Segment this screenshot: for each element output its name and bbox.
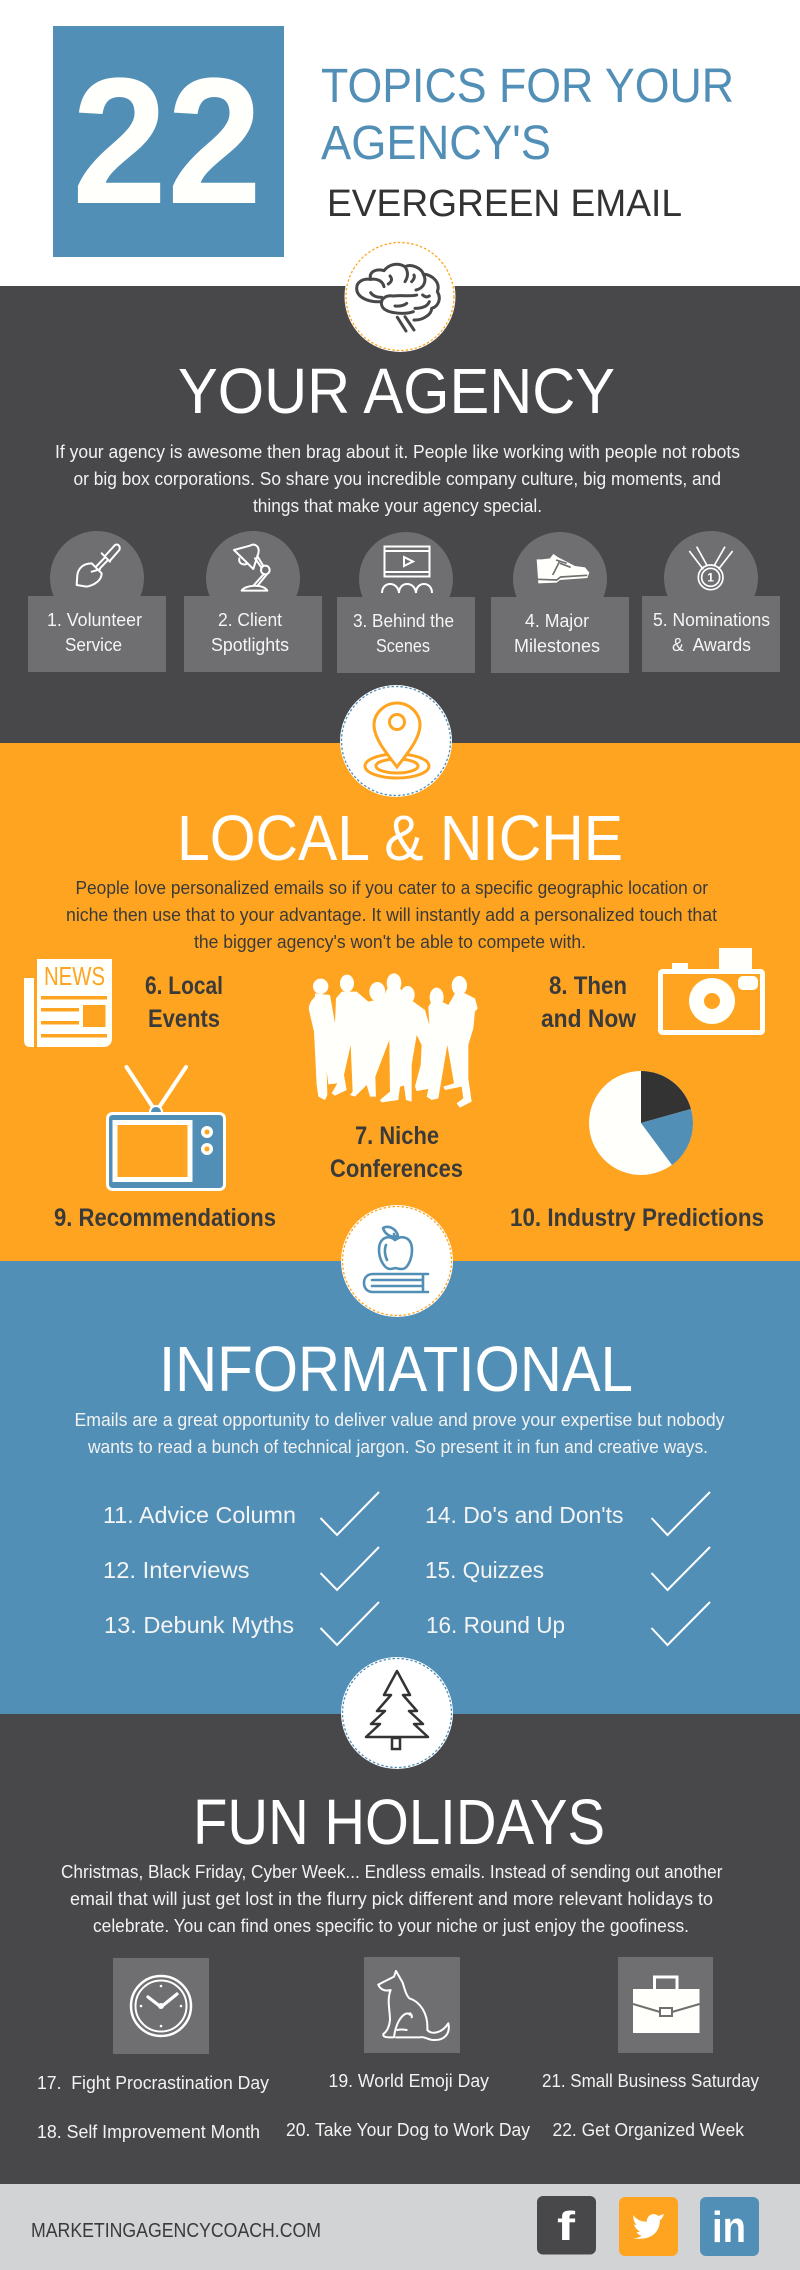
- text block: informational intro: Emails are a great opportunity to deliver value and prove your expertise but nobody: [74, 1410, 724, 1430]
- icon: sitting dog: [364, 1957, 460, 2053]
- heading: your agency: YOUR AGENCY: [178, 355, 615, 427]
- checklist: topics 11 to 16: 11. Advice Column: [103, 1502, 296, 1528]
- title block: [53, 26, 734, 257]
- card: nominations and awards: & Awards: [672, 635, 751, 655]
- text block: your agency intro: If your agency is awesome then brag about it. People like working with people not robots: [55, 442, 740, 462]
- icon: desk lamp: [234, 545, 270, 591]
- icon: linkedin: in: [712, 2203, 746, 2252]
- illustration: people silhouette: [309, 973, 478, 1108]
- panel: your agency background: [0, 286, 800, 743]
- checklist: topics 11 to 16: 14. Do's and Don'ts: [425, 1502, 624, 1528]
- list: holiday names: 22. Get Organized Week: [552, 2120, 745, 2140]
- heading: evergreen email: EVERGREEN EMAIL: [327, 183, 682, 225]
- text block: informational intro: wants to read a bunch of technical jargon. So present it in fun and creative ways.: [87, 1437, 708, 1457]
- text block: local and niche intro: niche then use that to your advantage. It will instantly add a personalized touch that: [66, 905, 717, 925]
- heading: local and niche: LOCAL & NICHE: [177, 802, 623, 874]
- text block: local and niche intro: People love personalized emails so if you cater to a specific geographic location or: [76, 878, 708, 898]
- checklist: topics 11 to 16: 12. Interviews: [103, 1557, 250, 1583]
- card: client spotlights: 2. Client: [218, 610, 282, 630]
- list: holiday names: 21. Small Business Saturday: [542, 2071, 759, 2091]
- footer url: MARKETINGAGENCYCOACH.COM: [31, 2220, 321, 2242]
- heading: informational: INFORMATIONAL: [159, 1333, 633, 1405]
- icon: brain: [344, 241, 456, 352]
- label: 7 niche conferences: [330, 1122, 463, 1183]
- label: 6 local events: [145, 972, 223, 1033]
- card: major milestones: Milestones: [514, 636, 600, 656]
- text block: your agency intro: things that make your agency special.: [253, 496, 542, 516]
- label: 10 industry predictions: 10. Industry Predictions: [510, 1204, 764, 1232]
- panel: informational background: [0, 1261, 800, 1714]
- icon: video film: [382, 546, 432, 593]
- icon: facebook: [537, 2196, 596, 2254]
- label: 8 then and now: [541, 972, 636, 1033]
- icon: briefcase: [618, 1957, 713, 2053]
- panel: footer background: [0, 2184, 800, 2270]
- card: volunteer service: 1. Volunteer: [47, 610, 142, 630]
- text block: local and niche intro: the bigger agency's won't be able to compete with.: [194, 932, 586, 952]
- card: volunteer service: Service: [65, 635, 122, 655]
- icon: apple and book: [341, 1205, 453, 1317]
- label: 7 niche conferences: Conferences: [330, 1155, 463, 1183]
- icon: camera: [660, 948, 762, 1032]
- icon: pine tree: [341, 1657, 453, 1769]
- icon: newspaper: NEWS: [44, 961, 105, 991]
- heading: topics for your agency's: AGENCY'S: [321, 117, 551, 170]
- icon: facebook: f: [557, 2203, 575, 2249]
- card: nominations and awards: [642, 531, 780, 672]
- card: client spotlights: [184, 531, 322, 672]
- list: holiday names: [37, 2071, 759, 2142]
- icon: trowel: [77, 545, 120, 587]
- card: behind the scenes: Scenes: [376, 636, 430, 656]
- icon: sneaker: [537, 554, 589, 583]
- icon: twitter: [619, 2197, 678, 2256]
- panel: local and niche background: [0, 743, 800, 1261]
- list: holiday names: 17. Fight Procrastination Day: [37, 2073, 269, 2093]
- icon: television: [108, 1067, 224, 1190]
- icon: newspaper: [24, 959, 112, 1047]
- checklist: topics 11 to 16: 16. Round Up: [426, 1612, 565, 1638]
- icon: check marks: [320, 1492, 710, 1645]
- icon: linkedin: [700, 2197, 759, 2256]
- checklist: topics 11 to 16: 13. Debunk Myths: [104, 1612, 294, 1638]
- label: 6 local events: 6. Local: [145, 972, 223, 1000]
- heading: topics for your agency's: TOPICS FOR YOUR: [321, 60, 734, 113]
- number badge: 22: 22: [72, 41, 262, 242]
- card: nominations and awards: 5. Nominations: [653, 610, 770, 630]
- icon: medal: [689, 547, 733, 590]
- card: client spotlights: Spotlights: [211, 635, 289, 655]
- icon: map pin: [340, 685, 452, 797]
- text block: fun holidays intro: Christmas, Black Friday, Cyber Week... Endless emails. Instead of sending out another: [61, 1862, 722, 1882]
- card: volunteer service: [28, 531, 166, 672]
- text block: fun holidays intro: email that will just get lost in the flurry pick different and more relevant holidays to: [70, 1889, 713, 1909]
- card: behind the scenes: [337, 532, 475, 673]
- heading: fun holidays: FUN HOLIDAYS: [193, 1786, 605, 1858]
- label: 8 then and now: 8. Then: [549, 972, 627, 1000]
- list: holiday names: 20. Take Your Dog to Work Day: [286, 2120, 530, 2140]
- text block: informational intro: [74, 1410, 724, 1457]
- text block: your agency intro: [55, 442, 740, 516]
- label: 7 niche conferences: 7. Niche: [355, 1122, 439, 1150]
- label: 6 local events: Events: [148, 1005, 220, 1033]
- panel: fun holidays background: [0, 1714, 800, 2184]
- text block: fun holidays intro: [61, 1862, 722, 1936]
- checklist: topics 11 to 16: [103, 1492, 710, 1645]
- text block: local and niche intro: [66, 878, 717, 952]
- heading: topics for your agency's: [321, 60, 734, 170]
- list: holiday names: 19. World Emoji Day: [328, 2071, 489, 2091]
- card: behind the scenes: 3. Behind the: [353, 611, 454, 631]
- label: 8 then and now: and Now: [541, 1005, 636, 1033]
- list: holiday names: 18. Self Improvement Month: [37, 2122, 260, 2142]
- label: 9 recommendations: 9. Recommendations: [54, 1204, 276, 1232]
- card: major milestones: [491, 532, 629, 673]
- card: major milestones: 4. Major: [525, 611, 589, 631]
- checklist: topics 11 to 16: 15. Quizzes: [425, 1557, 544, 1583]
- icon: clock: [113, 1958, 209, 2054]
- chart: pie: [589, 1071, 693, 1175]
- icon: medal: 1: [707, 571, 714, 585]
- text block: fun holidays intro: celebrate. You can find ones specific to your niche or just enjoy the goofiness.: [93, 1916, 689, 1936]
- text block: your agency intro: or big box corporations. So share you incredible company culture, big moments, and: [74, 469, 721, 489]
